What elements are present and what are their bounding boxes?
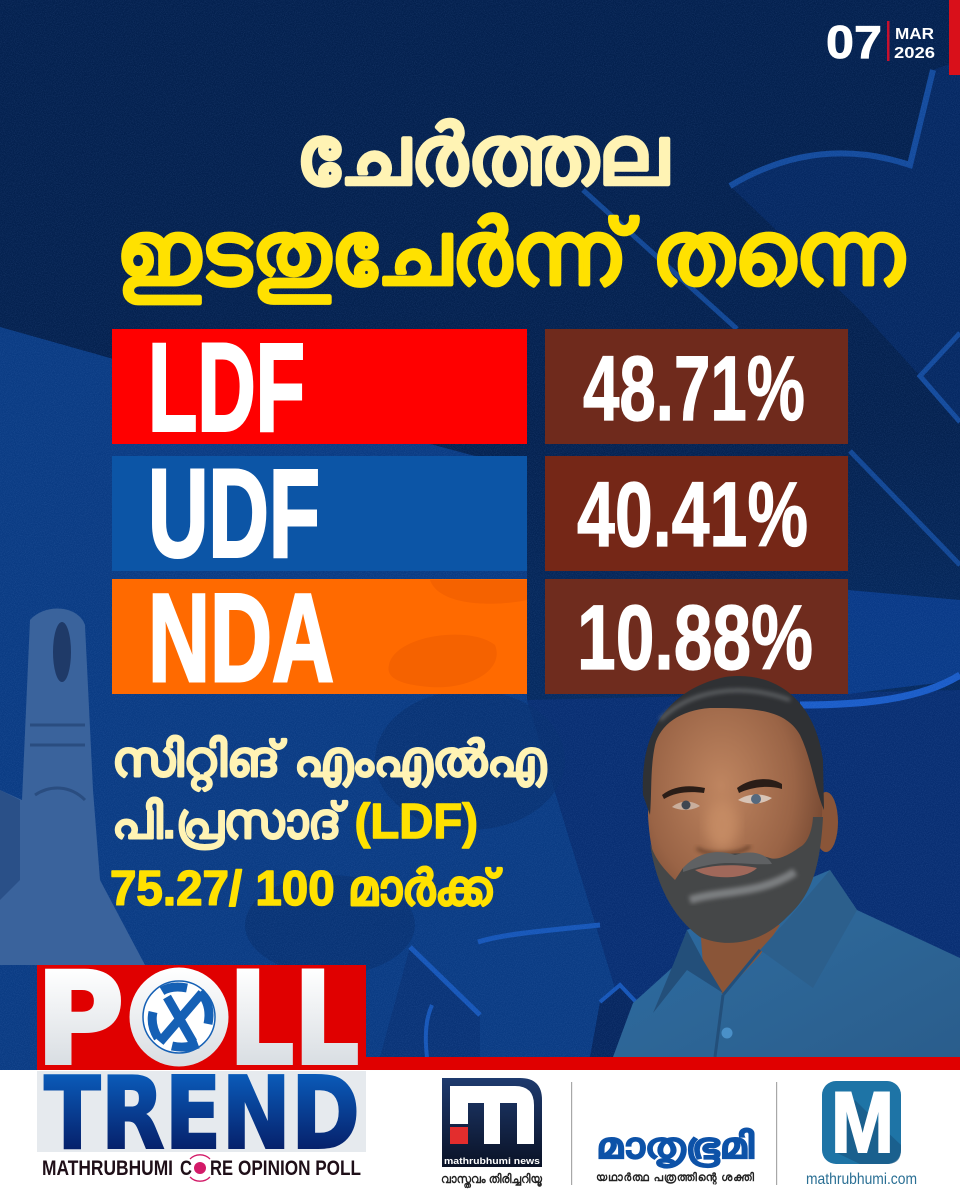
result row: NDA (112, 569, 848, 708)
result row: UDF: 40.41% (577, 464, 808, 566)
logo: Mathrubhumi newspaper (596, 1125, 755, 1185)
logo: Poll Trend: TREND (44, 1055, 360, 1172)
date stamp (826, 0, 960, 75)
trend panel (37, 1071, 366, 1152)
logo: Mathrubhumi News: mathrubhumi news (444, 1156, 540, 1167)
ballot seal (130, 968, 228, 1066)
divider (776, 1082, 777, 1185)
nose highlight (706, 800, 738, 850)
title: ഇടതുചേർന്ന് തന്നെ (116, 204, 905, 305)
date stamp: 07 (826, 16, 882, 68)
logo: Mathrubhumi News (441, 1078, 543, 1188)
strapline: RE (210, 1157, 233, 1180)
background: inked finger illustration (0, 609, 145, 965)
sitting MLA text block: പി.പ്രസാദ് (LDF) (112, 795, 478, 850)
result row: LDF: LDF (148, 318, 305, 458)
logo: Mathrubhumi newspaper: മാതൃഭൂമി (596, 1125, 754, 1168)
letters LL: LL (229, 945, 359, 1093)
red corner bar (949, 0, 960, 75)
strapline: OPINION POLL (238, 1157, 361, 1180)
strapline: MATHRUBHUMI (42, 1157, 173, 1180)
logo: mathrubhumi.com (806, 1075, 917, 1188)
poll panel (37, 965, 366, 1070)
result row: NDA: NDA (148, 569, 334, 708)
white footer band (0, 1070, 960, 1200)
sitting MLA text block: സിറ്റിങ് എംഎൽഎ (112, 733, 547, 792)
date stamp: MAR (895, 26, 934, 43)
strapline (42, 1155, 361, 1181)
sitting MLA text block: 75.27/ 100 മാർക്ക് (110, 862, 502, 916)
moustache (683, 852, 772, 872)
result row: LDF: 48.71% (583, 338, 805, 440)
title: ചേർത്തല (296, 109, 670, 202)
eyebrows (662, 786, 705, 799)
eyes (672, 802, 700, 810)
sitting MLA text block (110, 733, 547, 916)
strapline: C (180, 1157, 192, 1180)
date stamp: 2026 (894, 45, 935, 62)
lips (695, 865, 757, 877)
result row: LDF (112, 318, 848, 458)
collar (760, 870, 857, 988)
ear (814, 792, 838, 852)
logo: mathrubhumi.com: mathrubhumi.com (806, 1171, 917, 1188)
divider (571, 1082, 572, 1185)
logo: Poll Trend (36, 945, 366, 1181)
logo: Mathrubhumi News: വാസ്തവം തിരിച്ചറിയൂ (441, 1172, 543, 1188)
portrait of P. Prasad (613, 676, 960, 1057)
logo: mathrubhumi.com: M (831, 1075, 894, 1171)
result row: UDF (112, 444, 848, 584)
result row: NDA: 10.88% (577, 587, 813, 689)
neck (700, 925, 780, 995)
face (648, 695, 822, 935)
red footer rule (37, 1057, 960, 1070)
beard (650, 817, 823, 943)
title (116, 109, 905, 305)
hair (643, 676, 824, 815)
shirt (613, 870, 960, 1057)
button (722, 1028, 732, 1038)
result row: UDF: UDF (148, 444, 320, 584)
logo: Mathrubhumi newspaper: യഥാർത്ഥ പത്രത്തിന്റെ ശക്തി (596, 1171, 755, 1185)
letter P: P (36, 945, 124, 1093)
